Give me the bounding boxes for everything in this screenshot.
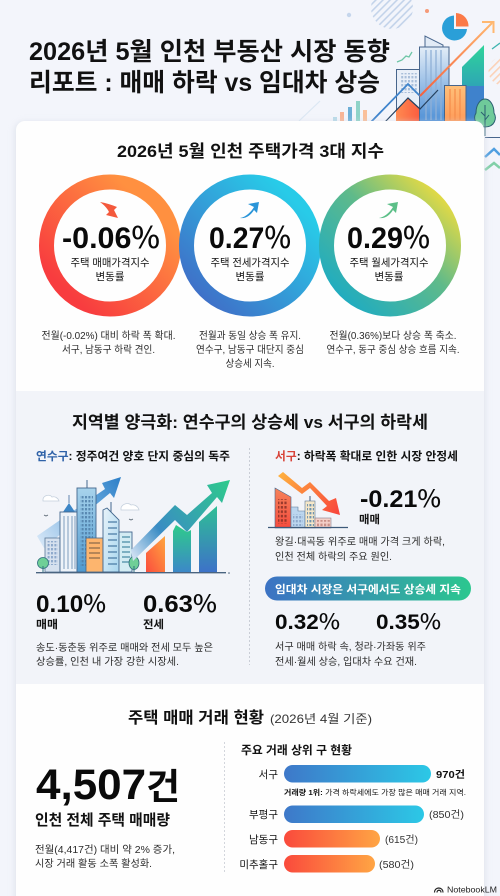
text: jeonse note: 상승세 지속.: [226, 358, 274, 370]
stat: Seo-gu sales: -0.21%: [360, 479, 441, 514]
bar: Seo-gu: 970건: [436, 769, 465, 781]
text: total note: [35, 844, 175, 870]
panel: regional polarization band: [16, 391, 484, 684]
text: monthly rent note: 전월(0.36%)보다 상승 폭 축소.: [330, 330, 456, 342]
heading: transactions: [128, 709, 372, 727]
text: jeonse note: [196, 330, 304, 370]
title: [29, 38, 390, 97]
text: monthly rent note: 연수구, 동구 중심 상승 흐름 지속.: [326, 344, 460, 356]
text: Seo-gu rental note: 서구 매매 하락 속, 청라·가좌동 위주: [275, 640, 426, 653]
bar chart: top districts: 주요 거래 상위 구 현황: [241, 743, 352, 757]
heading: three indices: 2026년 5월 인천 주택가격 3대 지수: [117, 142, 384, 161]
ring: jeonse index: 변동률: [236, 271, 265, 283]
bar: Seo-gu: [259, 765, 465, 782]
callout: rental market pill: 임대차 시장은 서구에서도 상승세 지속: [275, 582, 461, 596]
stat: Yeonsu sales: 0.10%: [36, 584, 106, 619]
text: total note: 전월(4,417건) 대비 약 2% 증가,: [35, 844, 175, 856]
text: jeonse note: 전월과 동일 상승 폭 유지.: [199, 330, 301, 342]
bar: Seo-gu: 서구: [259, 769, 278, 781]
text: Seo-gu note: 왕길·대곡동 위주로 매매 가격 크게 하락,: [275, 535, 445, 548]
bar: Bupyeong-gu: 부평구: [249, 809, 278, 821]
stat: Yeonsu sales: 매매: [36, 617, 58, 631]
text: Yeonsu note: 송도·동춘동 위주로 매매와 전세 모두 높은: [36, 641, 213, 654]
panel: Seo-gu: [265, 449, 471, 668]
text: Seo-gu rental note: 전세·월세 상승, 입대차 수요 건재.: [275, 655, 417, 668]
text: total note: 시장 거래 활동 소폭 활성화.: [35, 857, 152, 870]
subheading: Seo-gu: 서구: 하락폭 확대로 인한 시장 안정세: [275, 449, 458, 463]
subheading: Yeonsu-gu: 연수구: 정주여건 양호 단지 중심의 독주: [36, 449, 230, 463]
callout: rental market pill: [265, 576, 471, 600]
heading: polarization: 지역별 양극화: 연수구의 상승세 vs 서구의 하락세: [72, 413, 428, 432]
stat: total transactions: [35, 761, 180, 829]
panel: home transaction status: [35, 709, 466, 874]
title: 리포트 : 매매 하락 vs 임대차 상승: [29, 69, 380, 97]
bar: Bupyeong-gu: [249, 806, 464, 823]
text: Seo-gu note: [275, 535, 445, 563]
panel: three price indices: [42, 142, 460, 370]
stat: Seo-gu jeonse: 0.32%: [275, 606, 340, 636]
stat: Seo-gu monthly rent: 0.35%: [376, 606, 441, 636]
stat: total transactions: 인천 전체 주택 매매량: [35, 812, 170, 829]
text: sales note: [42, 329, 176, 356]
note: Seo-gu rank: 거래량 1위: 가격 하락세에도 가장 많은 매매 거래 지역.: [284, 787, 466, 797]
text: sales note: 전월(-0.02%) 대비 하락 폭 확대.: [42, 329, 176, 342]
panel: Yeonsu-gu: [36, 449, 230, 668]
text: monthly rent note: [326, 330, 460, 356]
ring: sales index: 변동률: [96, 271, 125, 283]
heading: transactions: 주택 매매 거래 현황: [128, 709, 264, 727]
text: Yeonsu note: 상승률, 인천 내 가장 강한 시장세.: [36, 656, 179, 668]
text: sales note: 서구, 남동구 하락 견인.: [62, 343, 155, 356]
text: Seo-gu note: 인천 전체 하락의 주요 원인.: [275, 550, 392, 563]
bar: Michuhol-gu: (580건): [379, 859, 414, 871]
ring: jeonse index: 0.27%: [209, 213, 291, 257]
bar: Michuhol-gu: [239, 855, 414, 872]
ring: jeonse index: 주택 전세가격지수: [210, 256, 290, 269]
illustration: falling arrow and buildings: [268, 472, 348, 528]
title: 2026년 5월 인천 부동산 시장 동향: [29, 38, 390, 66]
bar: Namdong-gu: (615건): [385, 834, 418, 846]
stat: Seo-gu sales: 매매: [359, 512, 380, 526]
bar: Namdong-gu: 남동구: [249, 834, 278, 846]
ring: monthly rent index: 0.29%: [347, 213, 430, 257]
stat: Yeonsu jeonse: 0.63%: [143, 584, 217, 619]
ring: sales index: -0.06%: [62, 213, 160, 257]
ring: sales index: 주택 매매가격지수: [70, 256, 150, 269]
text: Yeonsu note: [36, 641, 213, 668]
ring: monthly rent index: 주택 월세가격지수: [350, 256, 429, 269]
bar: Bupyeong-gu: (850건): [429, 809, 464, 821]
ring: monthly rent index: [326, 182, 454, 309]
ring: monthly rent index: 변동률: [375, 271, 404, 283]
stat: Yeonsu jeonse: 전세: [143, 618, 164, 631]
bar: Michuhol-gu: 미추홀구: [239, 858, 278, 871]
logo: NotebookLM: NotebookLM: [447, 884, 497, 894]
stat: total transactions: 4,507건: [36, 761, 180, 809]
header illustration: city skyline and rising charts: [299, 0, 500, 170]
text: Seo-gu rental note: [275, 640, 426, 668]
text: jeonse note: 연수구, 남동구 대단지 중심: [196, 344, 304, 356]
heading: transactions: (2026년 4월 기준): [270, 712, 372, 726]
bar: Namdong-gu: [249, 830, 418, 848]
illustration: rising city and bar chart: [36, 477, 230, 574]
ring: jeonse index: [186, 182, 314, 309]
bar chart: top districts: [239, 743, 466, 872]
ring: sales index: [46, 182, 174, 309]
